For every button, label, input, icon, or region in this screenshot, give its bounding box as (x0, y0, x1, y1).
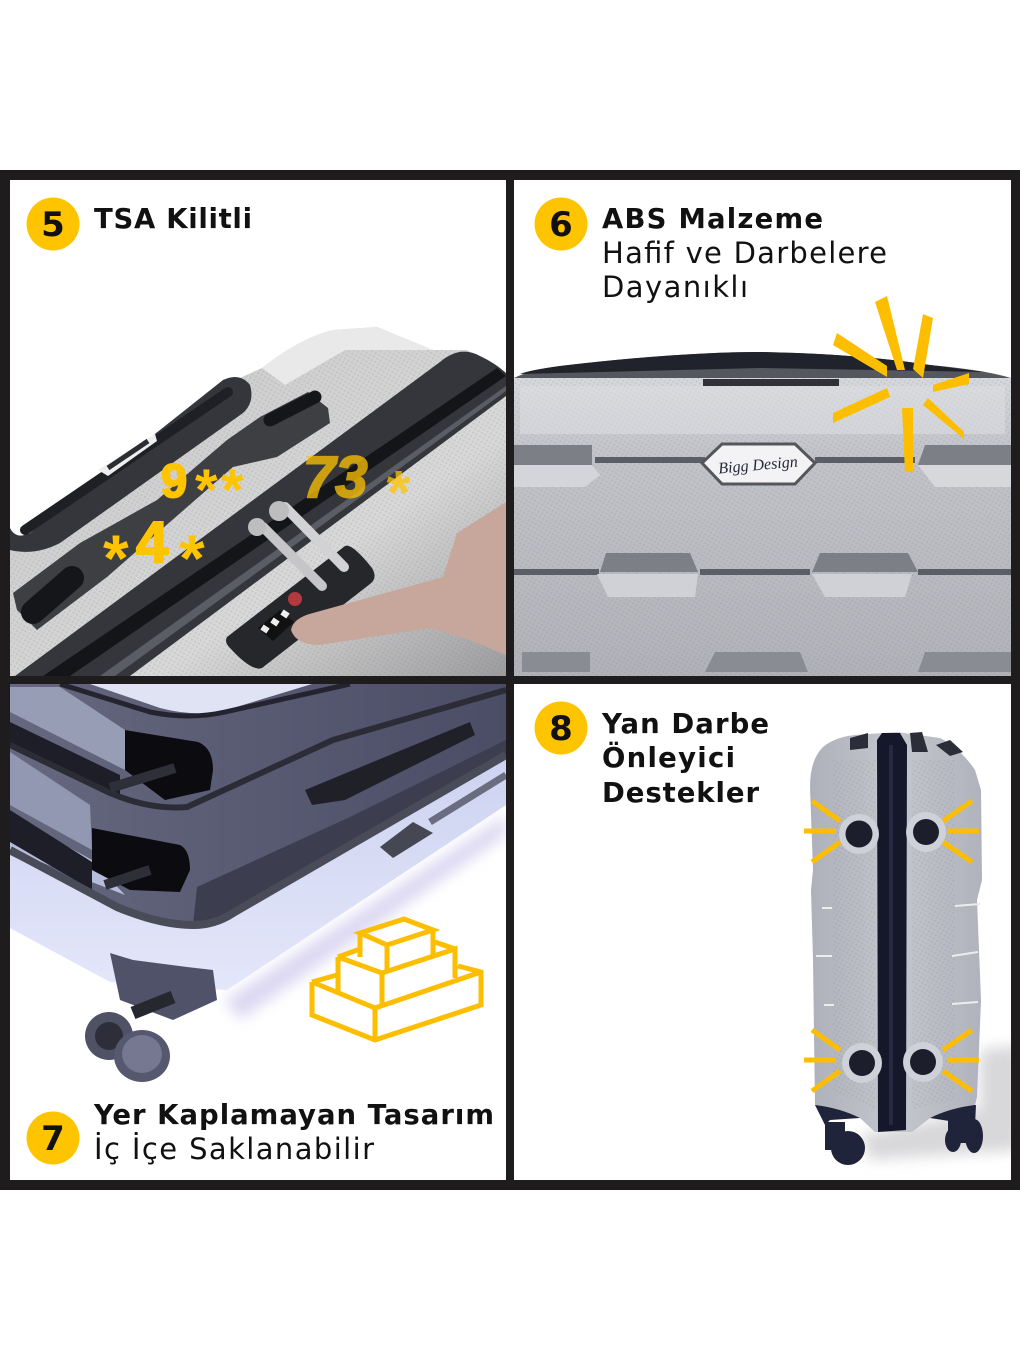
photo: open interior (90, 684, 312, 713)
text block: side bumpers: Önleyici (602, 740, 735, 774)
photo: top left silver rail (10, 687, 125, 770)
photo: center zipper (877, 733, 907, 1132)
photo: lower ribs (514, 553, 1011, 672)
photo: suitcase side shell (810, 732, 982, 1132)
photo: front wheel (114, 1030, 170, 1082)
photo: latch arm (430, 775, 506, 822)
panel: ABS material (514, 296, 1011, 676)
photo: dark rail (10, 722, 120, 800)
photo: wheel stem (133, 997, 173, 1013)
panel: side impact bumpers (804, 732, 1020, 1165)
badge: number 6: 6 (549, 205, 573, 245)
icon: impact burst (833, 296, 969, 472)
text block: ABS material: Dayanıklı (602, 270, 748, 304)
photo: rear handle (10, 377, 251, 552)
photo: finger pressing lock (291, 502, 506, 655)
photo: wheel bracket (110, 953, 217, 1020)
shell texture (833, 760, 955, 1110)
text block: floor saving design: Yer Kaplamayan Tasarım (93, 1099, 494, 1131)
photo: suitcase front shell (514, 378, 1011, 676)
photo: outer white shell (10, 750, 506, 990)
photo: brand badge: Bigg Design (718, 454, 798, 477)
panel: TSA lock (10, 327, 506, 676)
photo: navy base (815, 1105, 976, 1130)
photo: top black seal (60, 684, 350, 716)
text block: ABS material: Hafif ve Darbelere (602, 236, 887, 270)
photo: floor shadow (860, 1045, 1020, 1160)
photo: third rail (10, 810, 92, 890)
infographic: four feature panels (0, 170, 1020, 1190)
icon: impact rays (804, 801, 979, 1091)
text block: floor saving design: İç İçe Saklanabilir (94, 1132, 374, 1166)
panel: space saving nested design (10, 684, 506, 1082)
blurred code digits: * (179, 521, 205, 595)
badge: number 7: 7 (41, 1119, 65, 1159)
text block: floor saving design (93, 1099, 494, 1166)
blurred code digits: * (103, 521, 129, 595)
photo: zipper pulls (248, 501, 344, 586)
photo: top carry handle (13, 392, 330, 630)
photo: top lock and handles (850, 732, 963, 756)
badge: number 5 (26, 198, 80, 250)
text block: ABS material: ABS Malzeme (602, 203, 823, 235)
badge: number 8 (534, 702, 588, 754)
photo: shell rim (262, 327, 433, 385)
photo: lock strip (703, 379, 839, 386)
blurred code digits (103, 455, 410, 564)
photo: upper corner socket (125, 730, 213, 800)
text block: side bumpers: Destekler (602, 777, 759, 809)
photo: lower seam (10, 755, 506, 925)
photo: rear wheel (85, 1012, 133, 1060)
photo: lower interior band (193, 740, 506, 925)
text block: side bumpers (601, 708, 769, 809)
heading: TSA Kilitli: TSA Kilitli (94, 203, 252, 235)
shell texture (10, 327, 506, 676)
blurred code digits: 9 (161, 454, 187, 507)
photo: side latch (380, 822, 433, 858)
blurred code digits: * (384, 459, 411, 528)
photo: lower corner socket (92, 828, 190, 892)
blurred code digits: * (221, 458, 244, 523)
photo: shell ticks (816, 904, 980, 1005)
photo: nested dark shells (10, 684, 506, 925)
photo: left marble lining (10, 842, 125, 895)
photo: floor shadow (225, 815, 506, 1020)
badge: number 5: 5 (41, 205, 65, 245)
photo: upper ribs (514, 445, 1011, 487)
photo: center ridge (889, 745, 893, 1125)
photo: brand badge (702, 444, 815, 484)
badge: number 8: 8 (549, 709, 573, 749)
photo: top zipper edge (514, 352, 1011, 378)
photo: rubber bumpers (846, 819, 939, 1076)
photo: wheels (825, 1118, 983, 1165)
blurred code digits: 73 (303, 445, 368, 510)
black panel frame (0, 170, 1020, 1190)
photo: second rail (10, 752, 92, 850)
shell texture (514, 378, 1011, 676)
blurred code digits: 4 (136, 510, 168, 575)
photo: zipper band (15, 352, 506, 676)
photo: dark handle (305, 722, 475, 805)
photo: middle seam (10, 690, 506, 807)
icon: stacked boxes (312, 919, 481, 1040)
photo: axle hints (105, 768, 175, 885)
badge: number 7 (26, 1112, 80, 1164)
photo: suitcase top shell (10, 327, 506, 676)
blurred code digits: * (195, 458, 218, 523)
photo: combination lock (226, 546, 375, 669)
photo: bumper plates (839, 812, 946, 1083)
text block: ABS material (602, 203, 887, 304)
photo: upper highlight (520, 386, 1005, 434)
text block: side bumpers: Yan Darbe (601, 708, 769, 740)
badge: number 6 (534, 198, 588, 250)
